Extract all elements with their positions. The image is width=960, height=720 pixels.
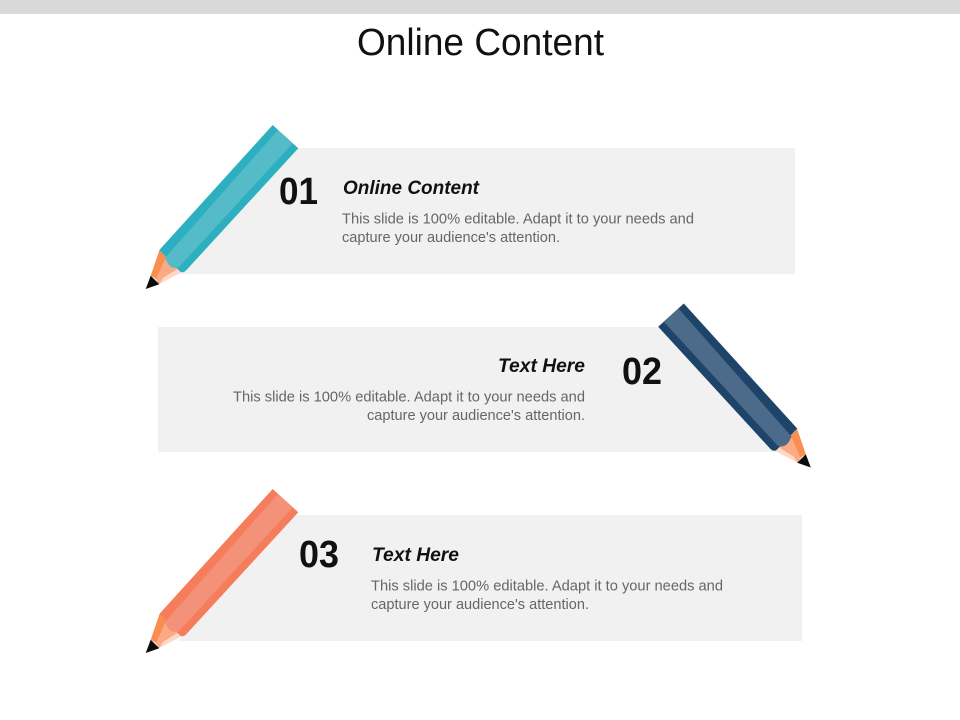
heading 01: Online Content <box>343 177 480 199</box>
title: Online Content <box>357 22 604 64</box>
body text 01 <box>342 212 694 246</box>
body text 01: This slide is 100% editable. Adapt it to your needs and <box>342 212 694 228</box>
body text 01: capture your audience's attention. <box>342 230 560 246</box>
panel background 02 <box>158 327 782 452</box>
panel: item 02 <box>158 327 782 452</box>
top bar <box>0 0 960 14</box>
number 01: 01 <box>279 171 318 213</box>
icon: navy pencil <box>658 304 811 468</box>
icon: teal pencil <box>146 125 298 289</box>
number 02: 02 <box>622 351 662 393</box>
body text 03: capture your audience's attention. <box>371 597 589 613</box>
panel: item 03 <box>178 515 802 641</box>
panel: item 01 <box>178 148 795 274</box>
panel background 01 <box>178 148 795 274</box>
number 03: 03 <box>299 534 339 576</box>
heading 02: Text Here <box>498 355 585 377</box>
body text 02: capture your audience's attention. <box>367 408 585 424</box>
body text 02: This slide is 100% editable. Adapt it to your needs and <box>233 390 585 406</box>
body text 03: This slide is 100% editable. Adapt it to your needs and <box>371 578 723 594</box>
icon: coral pencil <box>146 489 298 653</box>
body text 02 <box>233 390 585 424</box>
panel background 03 <box>178 515 802 641</box>
heading 03: Text Here <box>372 544 459 566</box>
body text 03 <box>371 578 723 613</box>
